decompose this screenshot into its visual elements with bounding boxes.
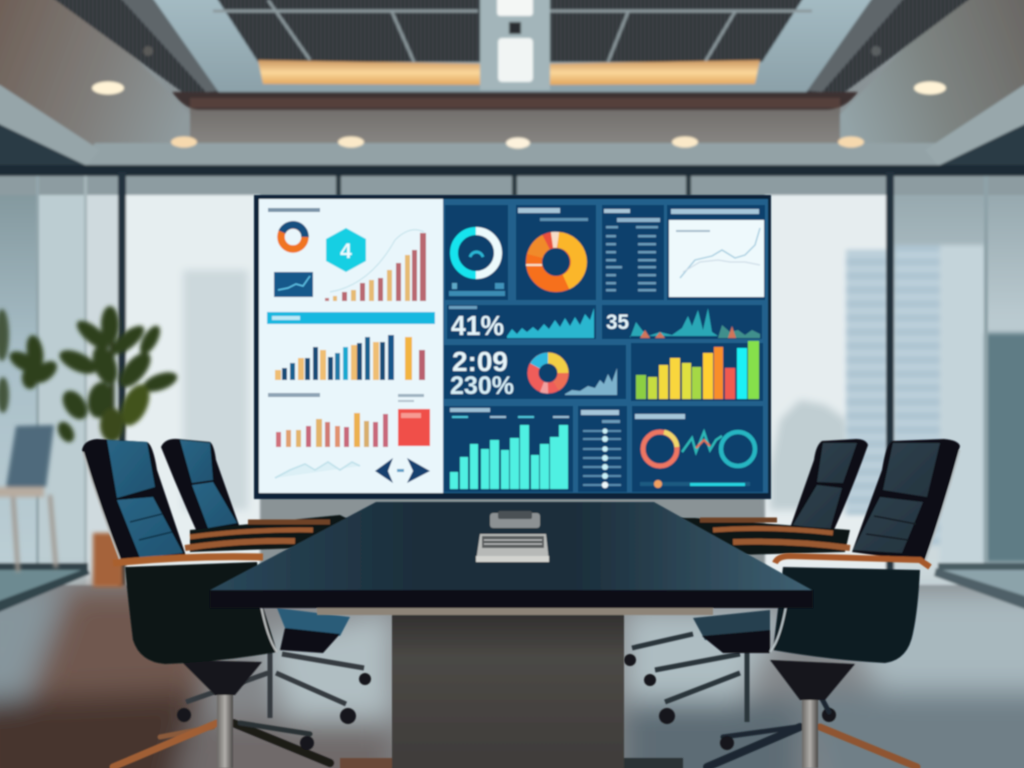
left glass wall bbox=[0, 195, 120, 595]
chair body bbox=[125, 562, 277, 664]
upper armrest bbox=[713, 529, 833, 533]
lower cushion bbox=[192, 482, 237, 528]
speakerphone device bbox=[490, 511, 540, 528]
tile: 41% stat bbox=[447, 305, 596, 341]
plant pot bbox=[93, 533, 123, 587]
chair: rear right bbox=[624, 439, 868, 724]
casters bbox=[177, 673, 371, 724]
seat shadow bbox=[190, 515, 350, 552]
floor block right of pedestal bbox=[624, 758, 683, 768]
shell silver edge bbox=[83, 452, 120, 560]
glass sill left bbox=[0, 568, 90, 620]
headrest cushion bbox=[817, 443, 857, 483]
warm beam glow bbox=[190, 98, 840, 108]
far armrest bbox=[248, 520, 330, 524]
lower ceiling band bbox=[80, 143, 955, 165]
upper armrest bbox=[190, 530, 313, 537]
teal glass base right bbox=[938, 570, 1024, 606]
tile: 2:09 and 230% stats bbox=[444, 345, 626, 400]
recessed ceiling grille bbox=[205, 0, 815, 62]
tile: cyan bar chart bbox=[444, 406, 573, 492]
window mullions bbox=[118, 172, 126, 592]
floor soft colour zones bbox=[0, 590, 1024, 768]
small blue chart card bbox=[274, 272, 313, 297]
seat underside bbox=[280, 628, 340, 653]
small donut icon bbox=[281, 225, 305, 249]
floor base bbox=[0, 585, 1024, 768]
tile: 41% stat: 41% bbox=[451, 310, 504, 341]
seat underside bbox=[702, 630, 770, 653]
center-left window bbox=[120, 195, 260, 595]
tile: dot list bbox=[578, 406, 627, 492]
window header band bbox=[0, 165, 1024, 176]
center ceiling column bbox=[480, 0, 550, 90]
lower soffit bbox=[190, 100, 840, 150]
right angled fascia bbox=[925, 85, 1024, 168]
table pedestal bbox=[392, 608, 624, 768]
lower armrest bbox=[733, 542, 850, 548]
glass sill band right bbox=[938, 563, 1024, 570]
pale line chart bbox=[275, 462, 360, 478]
headrest cushion bbox=[883, 443, 940, 497]
tile: white line chart bbox=[667, 205, 765, 300]
table top bbox=[210, 502, 812, 592]
chair base bbox=[186, 650, 364, 718]
ceiling downlights bbox=[92, 46, 946, 148]
right dark grille bbox=[805, 0, 995, 92]
chair bracket bbox=[180, 660, 262, 695]
armrest bbox=[775, 556, 930, 567]
chair: rear left bbox=[161, 439, 371, 724]
right grey beam bbox=[802, 0, 920, 92]
lower cushion bbox=[117, 497, 183, 558]
lower cushion bbox=[793, 485, 842, 530]
base legs bbox=[707, 695, 917, 767]
glass sill right bbox=[934, 568, 1024, 616]
chair back shell bbox=[161, 439, 240, 532]
golden light strip left bbox=[258, 60, 492, 85]
chair bracket bbox=[770, 660, 855, 700]
tile: orange donut bbox=[516, 205, 596, 300]
headrest cushion bbox=[107, 440, 155, 498]
armrest bbox=[113, 557, 263, 563]
pale tower left bbox=[183, 270, 248, 510]
seat cushion bbox=[277, 608, 350, 636]
lamp mount bbox=[509, 22, 521, 34]
red stat card bbox=[398, 409, 430, 446]
screen bezel bbox=[254, 195, 771, 499]
glass sill band left bbox=[0, 563, 88, 570]
tile: cyan gauge bbox=[445, 205, 508, 300]
light ceiling frame bbox=[140, 0, 885, 94]
rising bar chart bbox=[325, 230, 426, 301]
chair base bbox=[632, 634, 747, 722]
arm strut bbox=[770, 606, 786, 652]
chair back shell bbox=[790, 439, 868, 532]
table front edge bbox=[210, 590, 813, 608]
dark beam bbox=[172, 92, 858, 110]
tile: 35 stat bbox=[602, 305, 762, 339]
golden light strip right bbox=[540, 60, 760, 85]
caster bbox=[300, 736, 314, 750]
center-right window bbox=[765, 195, 895, 595]
teal glass base left bbox=[0, 570, 87, 612]
seat shadow bbox=[680, 518, 850, 555]
middle bar chart bbox=[275, 335, 425, 380]
wall display screen bbox=[254, 195, 771, 499]
chair: front right bbox=[693, 439, 960, 768]
left dark grille bbox=[28, 0, 228, 92]
chair column bbox=[217, 690, 233, 768]
ceiling lamp top bbox=[497, 0, 533, 16]
plant stem bbox=[110, 320, 114, 440]
ceiling right slope bbox=[815, 0, 1024, 170]
panel: light analytics column bbox=[259, 199, 443, 493]
second heading strip bbox=[268, 393, 320, 397]
chair: front left bbox=[82, 439, 350, 768]
shell silver edge bbox=[926, 450, 960, 560]
arm strut bbox=[261, 606, 277, 652]
tile: 35 stat: 35 bbox=[606, 311, 629, 334]
navigation arrows bbox=[375, 458, 430, 483]
floor block left of pedestal bbox=[340, 758, 392, 768]
left grey beam bbox=[104, 0, 228, 92]
chair back shell bbox=[852, 439, 960, 562]
chair body bbox=[773, 567, 920, 663]
ceiling left slope bbox=[0, 0, 215, 170]
right glass wall bbox=[890, 195, 1024, 595]
segmented donut bbox=[533, 358, 563, 388]
tile: 2:09 and 230% stats: 2:09 bbox=[452, 346, 508, 377]
tile: rings and squiggle bbox=[632, 406, 763, 492]
distant grey chair by the window bbox=[0, 425, 56, 572]
lower armrest bbox=[185, 541, 295, 548]
hexagon badge: 4 bbox=[340, 240, 352, 263]
caster bbox=[720, 736, 734, 750]
seat cushion bbox=[693, 610, 770, 640]
hexagon badge bbox=[326, 228, 366, 272]
conference table bbox=[210, 502, 813, 768]
base legs bbox=[113, 723, 330, 767]
left angled fascia bbox=[0, 85, 100, 168]
chair back shell bbox=[82, 439, 186, 562]
lower bar chart bbox=[276, 413, 388, 447]
keyboard control unit bbox=[476, 534, 549, 562]
plant leaves bbox=[0, 306, 180, 445]
lower cushion bbox=[853, 497, 923, 553]
under-table wood trim bbox=[317, 607, 713, 615]
casters bbox=[624, 654, 836, 724]
tile: 2:09 and 230% stats: 230% bbox=[450, 372, 514, 400]
headrest cushion bbox=[180, 440, 213, 483]
potted plant bbox=[0, 306, 180, 587]
cyan divider banner bbox=[267, 312, 435, 324]
panel: dark dashboard column bbox=[443, 199, 768, 493]
far armrest bbox=[700, 518, 777, 522]
heading strip bbox=[268, 208, 320, 212]
grille ribs bbox=[213, 0, 812, 62]
ceiling lamp main bbox=[498, 38, 533, 82]
tile: data table bbox=[602, 205, 664, 300]
right building bbox=[846, 245, 1024, 565]
chair column bbox=[802, 680, 818, 768]
small trend bars bbox=[565, 368, 617, 395]
distant skyline bbox=[770, 400, 847, 510]
tile: colored bar chart bbox=[631, 341, 763, 401]
